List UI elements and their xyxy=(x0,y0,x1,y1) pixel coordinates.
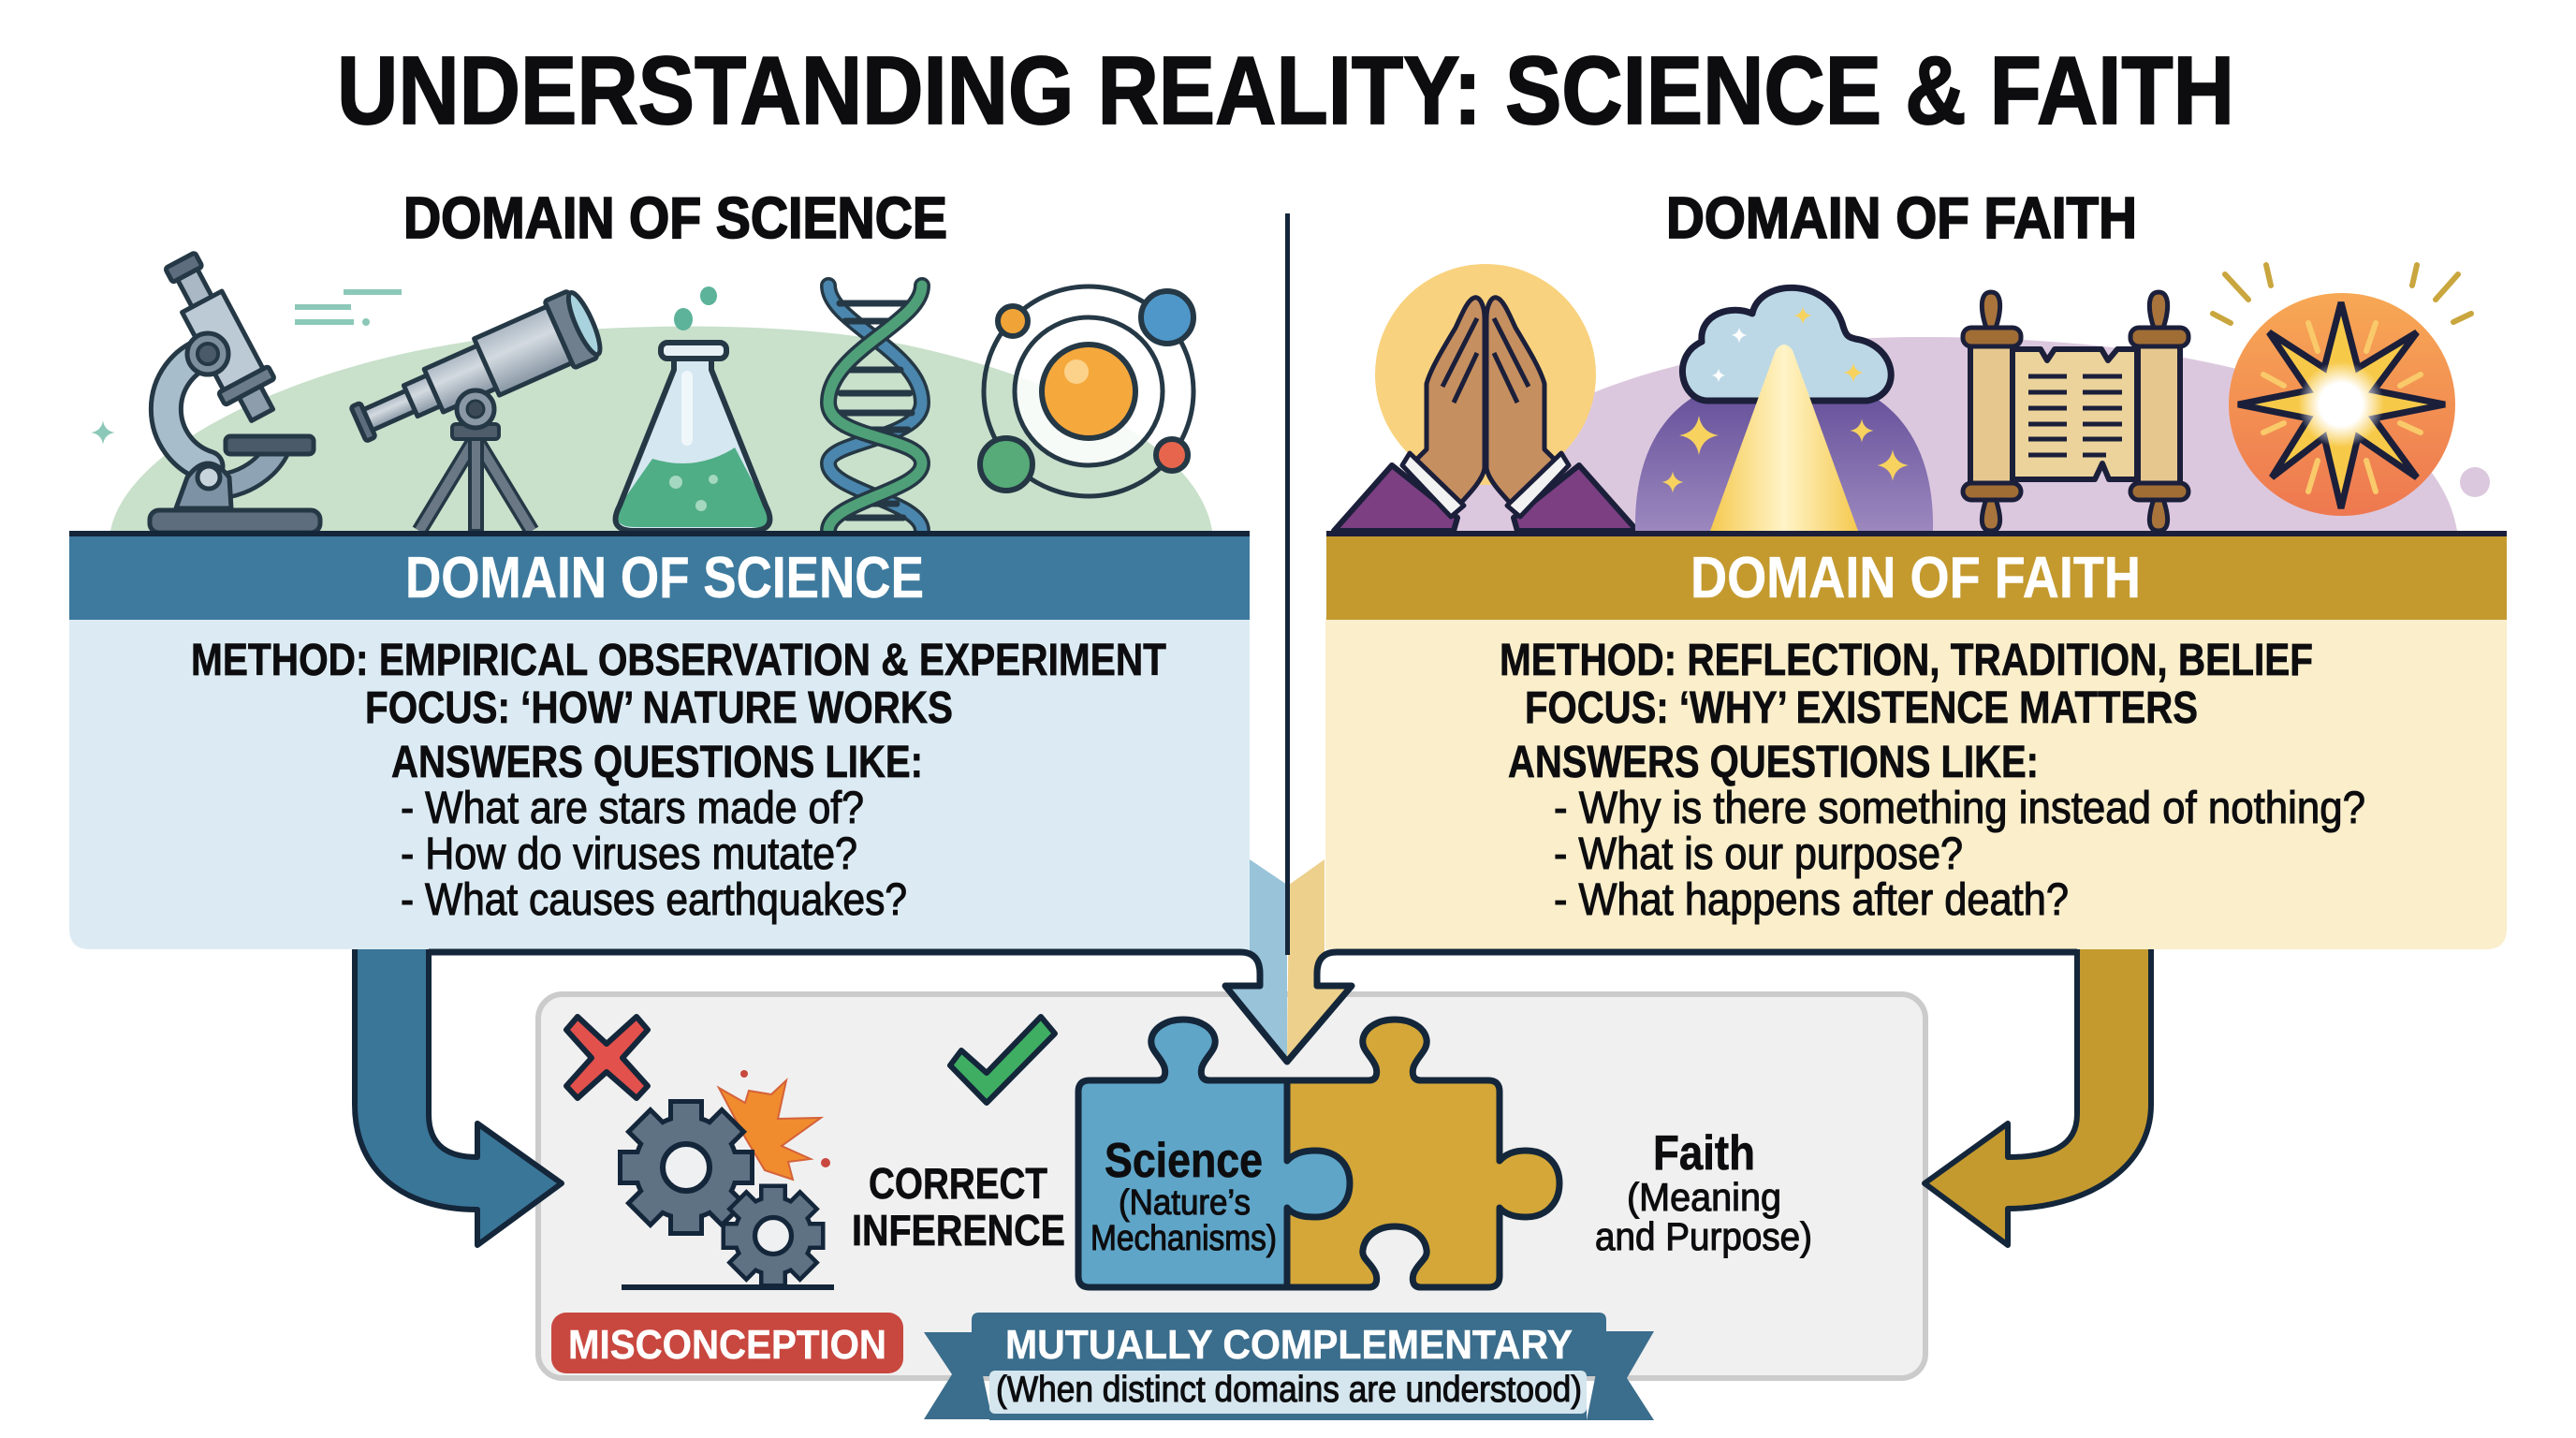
icon: scroll xyxy=(1963,292,2188,531)
icon: red x xyxy=(566,1017,648,1098)
icon: cloud with light beam xyxy=(1635,287,1933,531)
banner: mutually complementary: (When distinct domains are understood) xyxy=(996,1370,1582,1410)
panel header xyxy=(1326,533,2507,620)
badge: misconception xyxy=(551,1313,903,1373)
method and focus text: ANSWERS QUESTIONS LIKE: xyxy=(391,738,923,787)
question list: - How do viruses mutate? xyxy=(401,829,857,879)
explosion xyxy=(719,1070,830,1180)
panel header xyxy=(69,533,1250,620)
question list: - Why is there something instead of nothing? xyxy=(1554,784,2365,833)
arrow: science to synthesis xyxy=(355,949,562,1245)
panel body xyxy=(69,618,1250,949)
heading: domain of science: DOMAIN OF SCIENCE xyxy=(403,186,947,251)
method and focus text: FOCUS: ‘WHY’ EXISTENCE MATTERS xyxy=(1525,683,2198,733)
icon: praying hands xyxy=(1334,264,1637,531)
question list: - What causes earthquakes? xyxy=(401,875,907,925)
banner: mutually complementary: MUTUALLY COMPLEMENTARY xyxy=(1005,1322,1573,1368)
panel: science xyxy=(69,531,1250,949)
label: faith: Faith xyxy=(1653,1126,1755,1181)
panel body xyxy=(1325,618,2507,949)
science illustration row xyxy=(91,247,1212,533)
panel: synthesis xyxy=(538,994,1925,1378)
question list xyxy=(401,784,907,925)
faith illustration row xyxy=(1334,264,2490,531)
icon: clashing gears xyxy=(622,1070,834,1290)
title: UNDERSTANDING REALITY: SCIENCE & FAITH xyxy=(337,37,2234,144)
badge: misconception: MISCONCEPTION xyxy=(568,1322,886,1368)
label: science on puzzle: (Nature’s xyxy=(1119,1183,1251,1223)
purple hill backdrop xyxy=(1432,337,2457,531)
question list: - What happens after death? xyxy=(1554,875,2069,925)
icon: green check xyxy=(950,1017,1055,1103)
label: faith: (Meaning xyxy=(1627,1175,1781,1219)
heading: domain of faith: DOMAIN OF FAITH xyxy=(1666,186,2137,251)
icon: dna helix xyxy=(828,286,922,531)
label: correct inference xyxy=(852,1159,1065,1255)
icon: microscope xyxy=(150,247,320,533)
label: science on puzzle: Science xyxy=(1105,1134,1263,1188)
method and focus text xyxy=(1500,636,2313,787)
motion dashes and sparkle xyxy=(91,289,402,445)
arrow: faith to synthesis xyxy=(1925,949,2151,1245)
question list: - What are stars made of? xyxy=(401,784,864,833)
label: correct inference: CORRECT xyxy=(869,1159,1047,1208)
icon: radiant star xyxy=(2213,265,2490,516)
label: science on puzzle: Mechanisms) xyxy=(1090,1219,1277,1258)
panel: faith xyxy=(1325,531,2507,949)
method and focus text: METHOD: REFLECTION, TRADITION, BELIEF xyxy=(1500,636,2313,685)
label: faith: and Purpose) xyxy=(1595,1214,1812,1258)
icon: telescope xyxy=(344,286,607,531)
faith puzzle piece xyxy=(1287,1020,1559,1287)
label: science on puzzle xyxy=(1090,1134,1277,1258)
science puzzle piece xyxy=(1078,1020,1350,1287)
method and focus text xyxy=(191,636,1166,787)
icon: atom xyxy=(980,286,1193,496)
small gear xyxy=(725,1188,821,1284)
icon: flask xyxy=(616,286,769,531)
method and focus text: METHOD: EMPIRICAL OBSERVATION & EXPERIMENT xyxy=(191,636,1166,685)
banner: mutually complementary xyxy=(924,1313,1654,1420)
label: correct inference: INFERENCE xyxy=(852,1206,1065,1255)
method and focus text: FOCUS: ‘HOW’ NATURE WORKS xyxy=(365,683,953,733)
center divider xyxy=(1285,213,1290,955)
header text: DOMAIN OF FAITH xyxy=(1690,546,2141,610)
arrow: central converging xyxy=(429,859,2077,1062)
large gear xyxy=(622,1104,750,1231)
label: faith xyxy=(1595,1126,1812,1258)
header text: DOMAIN OF SCIENCE xyxy=(405,546,924,610)
green hill backdrop xyxy=(110,327,1212,531)
icon: interlocking puzzle pieces xyxy=(1078,1020,1559,1287)
question list xyxy=(1554,784,2365,925)
method and focus text: ANSWERS QUESTIONS LIKE: xyxy=(1508,738,2039,787)
question list: - What is our purpose? xyxy=(1554,829,1963,879)
